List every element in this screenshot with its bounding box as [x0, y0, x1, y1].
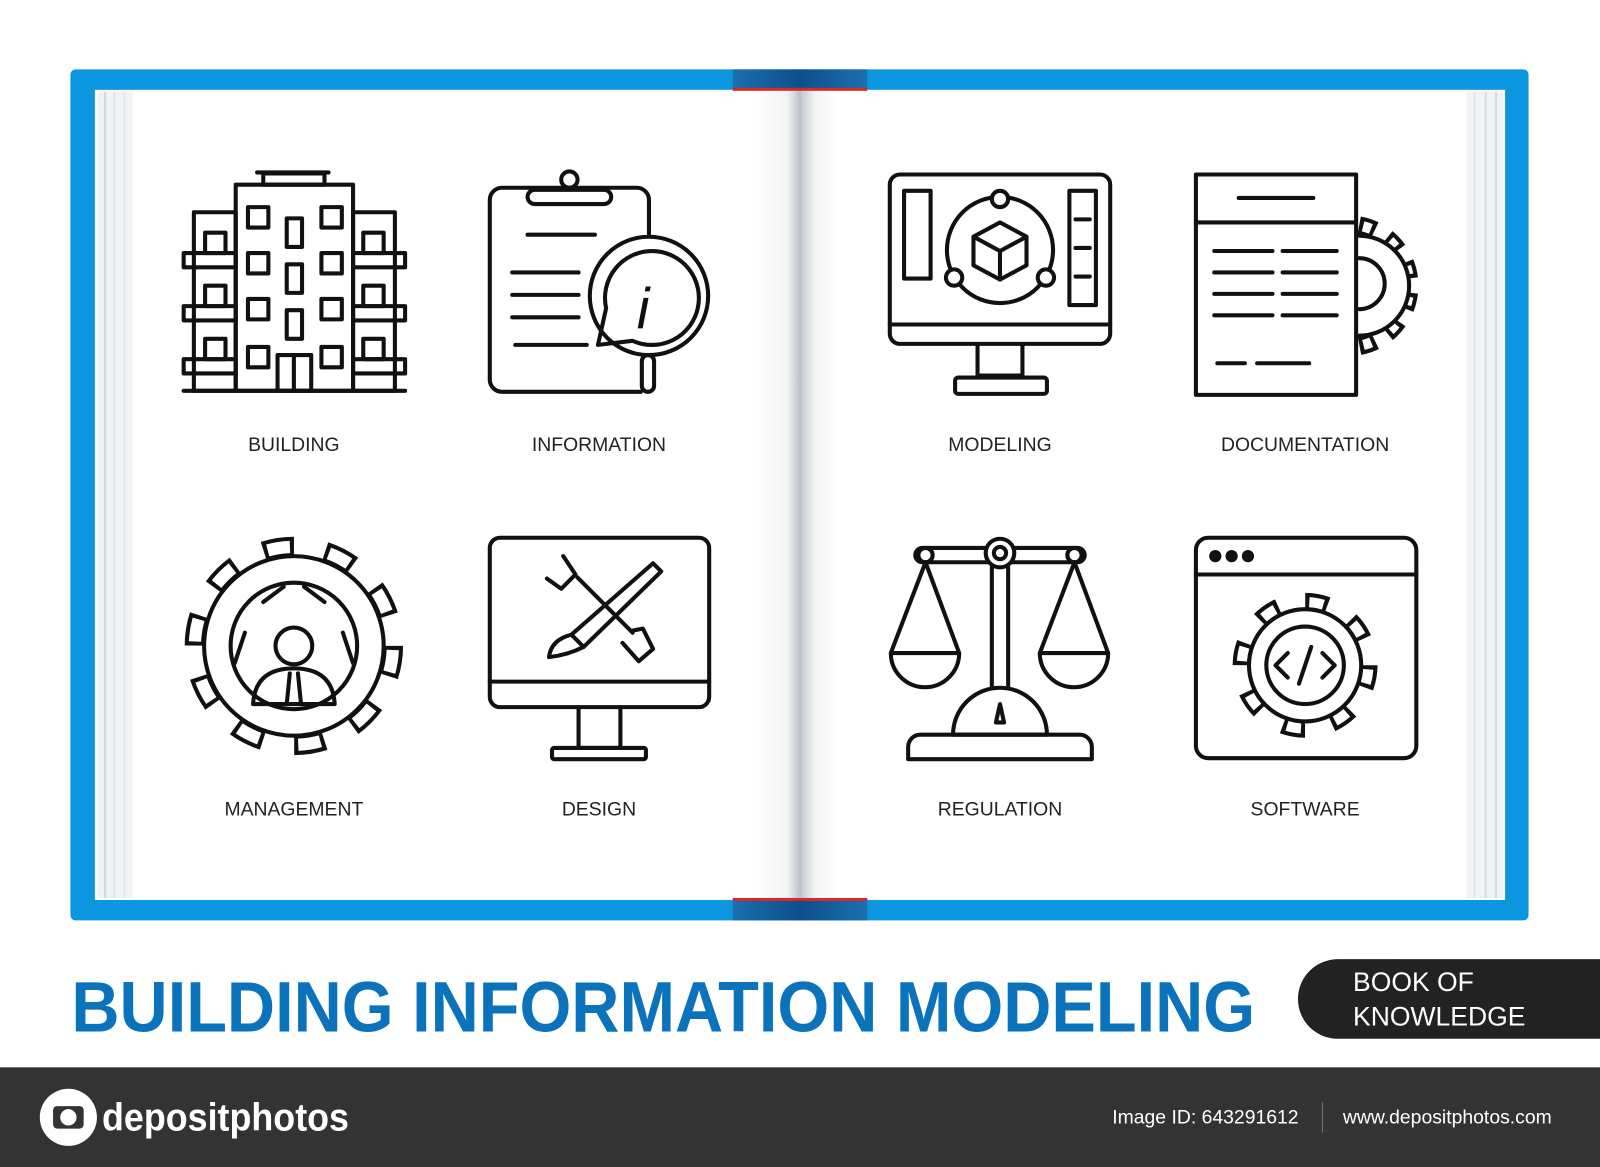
footer bar: depositphotos	[102, 1097, 349, 1140]
badge: book of knowledge	[1298, 959, 1600, 1039]
icon: information: i	[637, 278, 651, 342]
left page	[95, 90, 801, 900]
badge: book of knowledge: BOOK OF	[1353, 967, 1474, 997]
footer bar: www.depositphotos.com	[1342, 1106, 1552, 1128]
icon: information	[490, 171, 708, 392]
icon labels: SOFTWARE	[1251, 798, 1360, 820]
icon: software	[1196, 538, 1416, 758]
icon: building	[184, 172, 405, 391]
footer bar: Image ID: 643291612	[1112, 1106, 1299, 1128]
right page	[801, 90, 1505, 900]
spine tabs	[733, 69, 867, 920]
badge: book of knowledge: KNOWLEDGE	[1353, 1002, 1525, 1032]
icon: management	[195, 547, 393, 745]
footer bar	[0, 1067, 1600, 1167]
icon: design	[490, 538, 709, 759]
book	[70, 69, 1529, 920]
icon labels: MANAGEMENT	[224, 798, 363, 820]
icon labels: MODELING	[948, 434, 1052, 456]
icon labels	[224, 434, 1389, 820]
icon: modeling	[890, 174, 1110, 394]
icon labels: BUILDING	[248, 434, 340, 456]
icon labels: DOCUMENTATION	[1221, 434, 1389, 456]
icon labels: INFORMATION	[532, 434, 666, 456]
icon labels: REGULATION	[938, 798, 1062, 820]
icon labels: DESIGN	[562, 798, 636, 820]
icon: regulation	[891, 539, 1108, 759]
icon: documentation	[1196, 174, 1409, 395]
title: BUILDING INFORMATION MODELING	[71, 968, 1255, 1048]
